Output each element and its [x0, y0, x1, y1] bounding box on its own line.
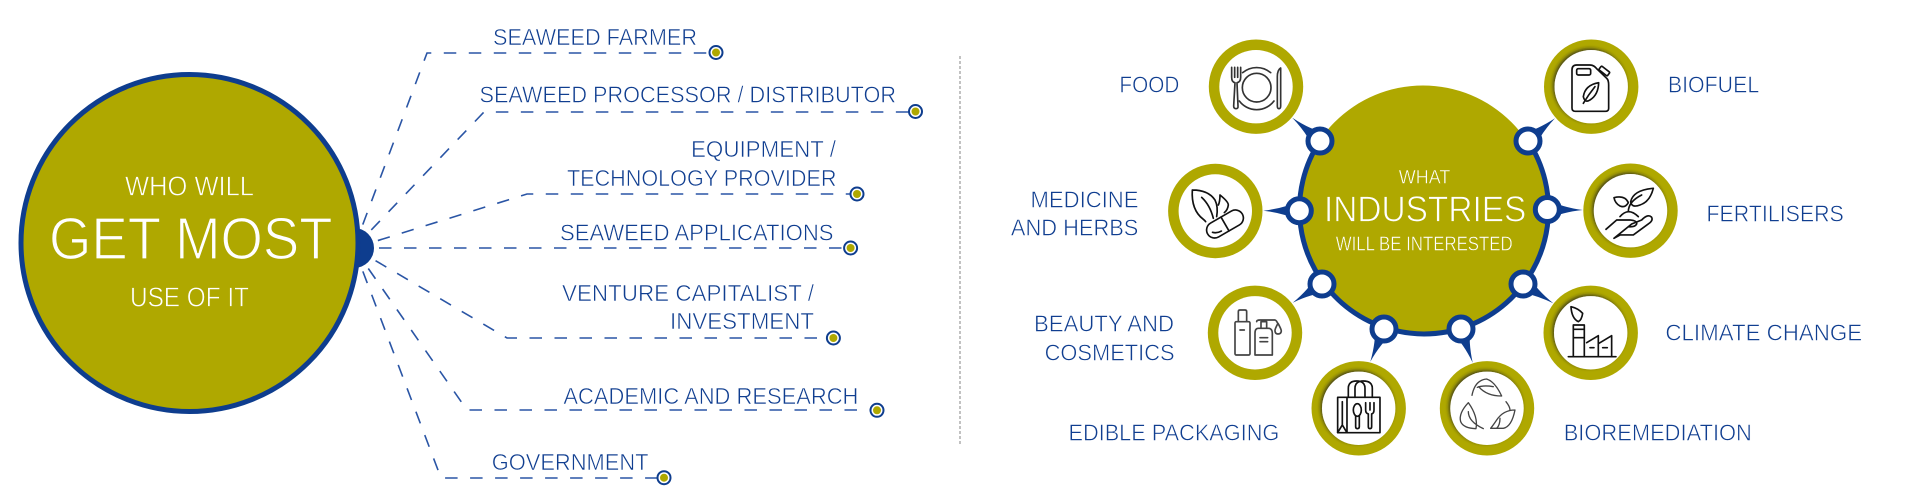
- item: biofuel: [1544, 39, 1759, 134]
- item: equipment / technology provider: [567, 136, 864, 200]
- panel: what industries will be interested: [1011, 39, 1862, 455]
- item: bioremediation: BIOREMEDIATION: [1564, 420, 1752, 446]
- item: equipment / technology provider: EQUIPMENT /: [691, 136, 837, 162]
- central circle with heading: INDUSTRIES: [1324, 188, 1526, 229]
- connector pointers: [1263, 118, 1583, 363]
- main circle with heading: USE OF IT: [130, 282, 249, 313]
- icon: hand holding plant: [1606, 188, 1653, 238]
- item: edible packaging: EDIBLE PACKAGING: [1068, 420, 1279, 446]
- item: food: [1119, 39, 1303, 134]
- item: equipment / technology provider: TECHNOLOGY PROVIDER: [567, 165, 836, 191]
- central circle with heading: WILL BE INTERESTED: [1336, 233, 1513, 255]
- main circle with heading: WHO WILL: [125, 171, 254, 202]
- dashed connector lines: [354, 53, 915, 478]
- item: fertilisers: FERTILISERS: [1706, 201, 1844, 227]
- main circle with heading: [21, 74, 358, 412]
- panel: who will get most use of it: [21, 24, 922, 484]
- central circle with heading: [1298, 86, 1548, 336]
- icon: bag with spoon and fork: [1338, 381, 1380, 433]
- item: edible packaging: [1068, 361, 1406, 455]
- item: venture capitalist / investment: [562, 280, 840, 344]
- item: medicine and herbs: MEDICINE: [1030, 187, 1138, 213]
- item: government: [492, 449, 670, 484]
- icon: factory with leaf: [1568, 307, 1616, 357]
- item: medicine and herbs: AND HERBS: [1011, 215, 1138, 241]
- item: bioremediation: [1440, 361, 1752, 455]
- item: medicine and herbs: [1011, 164, 1263, 258]
- item: climate change: [1544, 286, 1862, 380]
- icon: leaves and capsule: [1192, 190, 1246, 241]
- item: beauty and cosmetics: BEAUTY AND: [1034, 311, 1174, 337]
- connector nodes: [1287, 129, 1559, 341]
- item: seaweed applications: SEAWEED APPLICATIONS: [560, 220, 834, 246]
- connector hub: [334, 228, 374, 268]
- item: biofuel: BIOFUEL: [1668, 72, 1759, 98]
- main circle with heading: GET MOST: [49, 206, 332, 272]
- icon: recycling leaves: [1460, 379, 1515, 429]
- item: beauty and cosmetics: COSMETICS: [1045, 340, 1175, 366]
- central circle with heading: WHAT: [1399, 168, 1451, 189]
- icon: jerrycan with leaf: [1572, 65, 1610, 111]
- item: climate change: CLIMATE CHANGE: [1665, 320, 1862, 346]
- item: seaweed farmer: SEAWEED FARMER: [493, 24, 697, 50]
- icon: plate and cutlery: [1232, 67, 1281, 110]
- item: venture capitalist / investment: VENTURE CAPITALIST /: [562, 280, 815, 306]
- item: fertilisers: [1583, 164, 1844, 258]
- item: beauty and cosmetics: [1034, 286, 1302, 380]
- item: food: FOOD: [1119, 72, 1179, 98]
- item: academic and research: ACADEMIC AND RESEARCH: [563, 383, 858, 409]
- item: seaweed processor / distributor: SEAWEED PROCESSOR / DISTRIBUTOR: [480, 82, 896, 108]
- item: government: GOVERNMENT: [492, 449, 648, 475]
- icon: cosmetic bottles: [1235, 310, 1281, 355]
- item: venture capitalist / investment: INVESTMENT: [670, 308, 814, 334]
